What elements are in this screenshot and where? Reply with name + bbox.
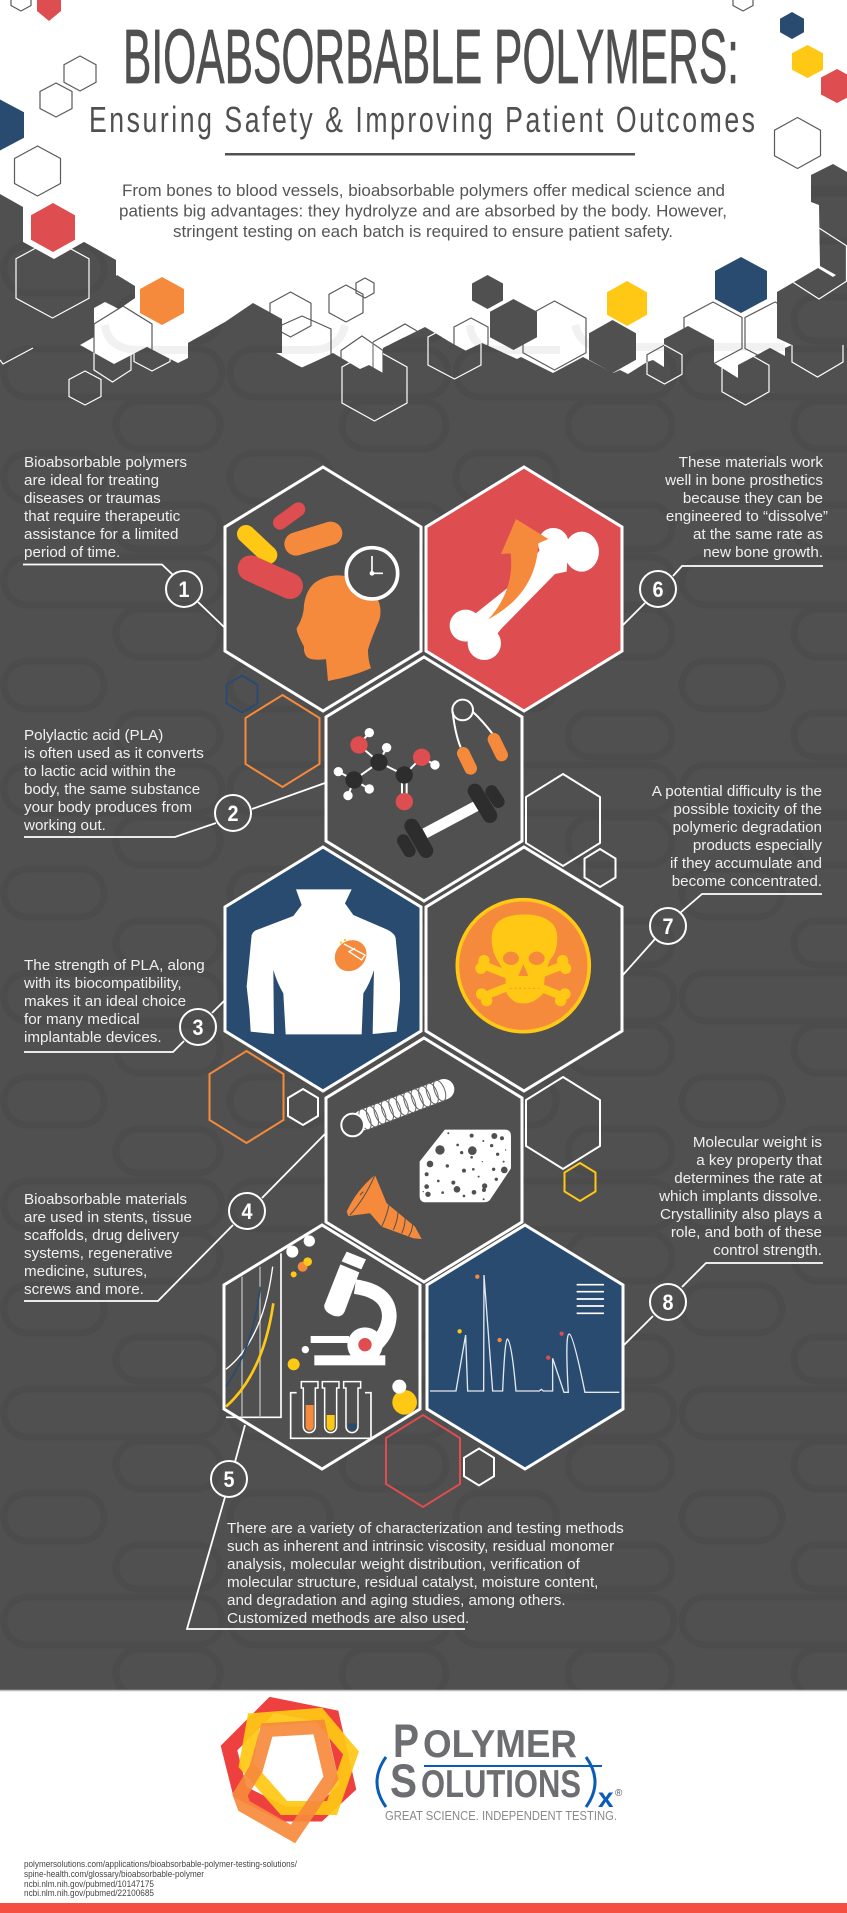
logo wordmark: OLUTIONS: [421, 1763, 581, 1806]
callout 7: possible toxicity of the: [673, 801, 822, 818]
hexagon 3: torso with implant: [225, 847, 421, 1091]
callout 6: [623, 454, 828, 625]
callout 6: These materials work: [679, 454, 823, 471]
logo wordmark: OLYMER: [423, 1723, 577, 1766]
callout 4: [24, 1134, 325, 1301]
icon: pills: [246, 509, 331, 586]
legend lines: [577, 1285, 604, 1313]
source links: ncbi.nlm.nih.gov/pubmed/10147175: [24, 1879, 154, 1889]
callout 1: assistance for a limited: [24, 526, 178, 543]
callout 5: [187, 1425, 624, 1629]
callout 8: a key property that: [696, 1152, 823, 1169]
callout 6: at the same rate as: [693, 526, 823, 543]
icon: large dots: [392, 1380, 417, 1415]
source links: ncbi.nlm.nih.gov/pubmed/22100685: [24, 1888, 154, 1898]
icon: growth arrow: [488, 519, 548, 619]
chart: chromatogram peaks: [430, 1275, 619, 1392]
subtitle: Ensuring Safety & Improving Patient Outcomes: [89, 99, 755, 140]
icon: lactic acid molecule: [334, 728, 440, 810]
hexagon 4: spring, scaffold and screw: [326, 1038, 522, 1282]
callout 6: new bone growth.: [703, 544, 823, 561]
callout 8: control strength.: [713, 1242, 822, 1259]
callout 4: 4: [242, 1199, 253, 1224]
callout 2: Polylactic acid (PLA): [24, 727, 163, 744]
hexagon 5: chart, microscope and test tubes: [224, 1225, 420, 1469]
logo mark: overlapping hexagon rings: [229, 1705, 351, 1834]
callout 8: Molecular weight is: [693, 1134, 822, 1151]
icon: dumbbell: [403, 791, 498, 851]
callout 8: 8: [662, 1290, 674, 1315]
callout 4: systems, regenerative: [24, 1245, 173, 1262]
hexagon 8: chromatogram: [427, 1225, 623, 1469]
icon: head silhouette: [297, 575, 381, 681]
callout 2: is often used as it converts: [24, 745, 204, 762]
source links: spine-health.com/glossary/bioabsorbable-polymer: [24, 1869, 204, 1879]
callout 4: Bioabsorbable materials: [24, 1191, 187, 1208]
icon: implant: [328, 934, 373, 978]
icon: hand gripper: [452, 700, 502, 768]
title rule: [225, 153, 635, 156]
callout 7: 7: [662, 914, 674, 939]
callout 6: 6: [652, 577, 664, 602]
callout 3: 3: [192, 1015, 204, 1040]
callout 3: makes it an ideal choice: [24, 993, 186, 1010]
icon: scattered dots: [286, 1235, 315, 1370]
callout 1: are ideal for treating: [24, 472, 159, 489]
callout 8: determines the rate at: [674, 1170, 823, 1187]
callout 2: body, the same substance: [24, 781, 200, 798]
callout 7: products especially: [693, 837, 822, 854]
callout 5: molecular structure, residual catalyst, moisture content,: [227, 1574, 598, 1591]
callout 4: scaffolds, drug delivery: [24, 1227, 179, 1244]
intro text: patients big advantages: they hydrolyze and are absorbed by the body. However,: [119, 202, 727, 220]
footer red bar: [0, 1903, 847, 1913]
icon: test tubes in rack: [291, 1382, 371, 1438]
callout 3: with its biocompatibility,: [23, 975, 182, 992]
logo wordmark: S: [390, 1754, 417, 1807]
callout 5: analysis, molecular weight distribution, verification of: [227, 1556, 581, 1573]
callout 8: [624, 1134, 823, 1345]
callout 6: engineered to “dissolve”: [666, 508, 828, 525]
callout 6: because they can be: [683, 490, 823, 507]
logo wordmark: [377, 1714, 623, 1823]
dark grey hexagon-edged background: [0, 164, 847, 1690]
callout 1: 1: [178, 577, 190, 602]
coloured accent hexagons: [210, 676, 616, 1507]
callout 2: 2: [228, 801, 238, 826]
white line hexagons over background: [0, 228, 846, 421]
callout 5: There are a variety of characterization and testing methods: [227, 1520, 624, 1537]
callout 2: your body produces from: [24, 799, 192, 816]
callout 8: which implants dissolve.: [658, 1188, 822, 1205]
callout 2: [23, 727, 325, 837]
callout 3: implantable devices.: [24, 1029, 162, 1046]
callout 3: The strength of PLA, along: [24, 957, 205, 974]
header hexagon band on white: [11, 0, 820, 394]
icon: clock: [346, 548, 398, 599]
logo wordmark: GREAT SCIENCE. INDEPENDENT TESTING.: [385, 1809, 617, 1823]
icon: torso: [247, 889, 400, 1034]
logo wordmark: ®: [615, 1788, 623, 1799]
source links: [24, 1859, 297, 1898]
logo wordmark: P: [393, 1714, 419, 1767]
icon: microscope: [311, 1252, 389, 1365]
source links: polymersolutions.com/applications/bioabsorbable-polymer-testing-solutions/: [24, 1859, 297, 1869]
callout 1: diseases or traumas: [24, 490, 161, 507]
callout 7: A potential difficulty is the: [652, 783, 822, 800]
callout 1: period of time.: [24, 544, 120, 561]
callout 1: [23, 454, 224, 627]
callout 7: become concentrated.: [672, 873, 822, 890]
callout 6: well in bone prosthetics: [664, 472, 823, 489]
icon: bone: [450, 528, 599, 660]
callout 7: polymeric degradation: [673, 819, 822, 836]
callout 8: role, and both of these: [671, 1224, 822, 1241]
callout 5: 5: [224, 1467, 234, 1492]
icon: crossbones: [475, 955, 571, 1006]
callout 8: Crystallinity also plays a: [660, 1206, 823, 1223]
callout 5: and degradation and aging studies, among others.: [227, 1592, 566, 1609]
callout 3: for many medical: [24, 1011, 140, 1028]
callout 3: [23, 957, 224, 1052]
callout 7: [622, 783, 822, 976]
intro text: From bones to blood vessels, bioabsorbable polymers offer medical science and: [122, 181, 725, 200]
hexagon 6: bone and arrow: [426, 467, 622, 711]
icon: stent spring: [341, 1079, 448, 1136]
callout 1: Bioabsorbable polymers: [24, 454, 187, 471]
hexagon 1: pills, head and clock: [225, 467, 421, 711]
logo wordmark: x: [598, 1782, 614, 1813]
icon: porous scaffold: [420, 1130, 511, 1202]
filled header hexagons: [0, 0, 847, 373]
peak markers: [457, 1274, 564, 1360]
callout 7: if they accumulate and: [670, 855, 822, 872]
callout 2: to lactic acid within the: [24, 763, 176, 780]
callout 5: such as inherent and intrinsic viscosity, residual monomer: [227, 1538, 614, 1555]
icon: bone screw: [347, 1175, 422, 1239]
intro text: [119, 181, 727, 241]
hexagon 7: skull and crossbones: [426, 847, 622, 1091]
callout 4: are used in stents, tissue: [24, 1209, 192, 1226]
callout 4: screws and more.: [24, 1281, 144, 1298]
hexagon 2: molecule, gripper and dumbbell: [326, 657, 522, 901]
callout 2: working out.: [23, 817, 106, 834]
callout 4: medicine, sutures,: [24, 1263, 147, 1280]
icon: skull: [492, 914, 557, 1003]
callout 5: Customized methods are also used.: [227, 1610, 469, 1627]
intro text: stringent testing on each batch is required to ensure patient safety.: [173, 222, 673, 241]
callout 1: that require therapeutic: [24, 508, 181, 525]
icon: growth chart: [226, 1253, 281, 1417]
